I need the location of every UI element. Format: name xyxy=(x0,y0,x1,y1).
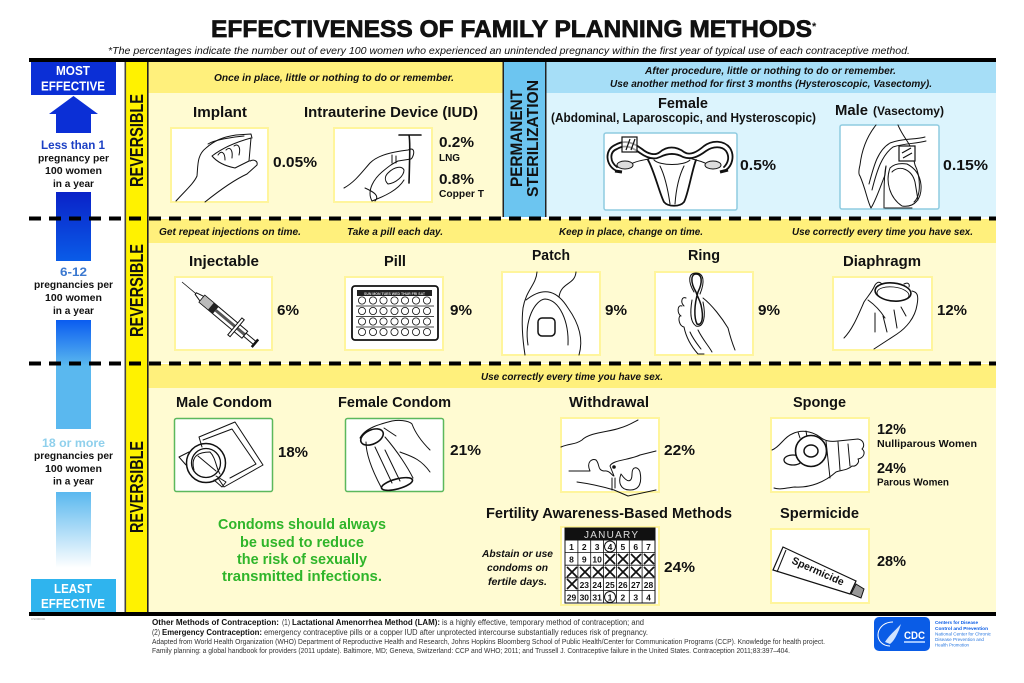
most effective label: EFFECTIVE xyxy=(41,78,105,94)
method: injectable: Injectable xyxy=(189,253,259,270)
method: male sterilization xyxy=(835,102,988,209)
callout: condoms message: Condoms should always xyxy=(218,516,386,533)
method: sponge xyxy=(771,394,977,492)
icon: calendar: JANUARY xyxy=(584,530,638,541)
heading: tier 2 instructions xyxy=(159,226,973,238)
tier 1 rate: Less than 1 xyxy=(41,138,105,152)
method: male sterilization: (Vasectomy) xyxy=(873,104,944,118)
tier 2 rate: 100 women xyxy=(45,292,102,304)
method: intrauterine device: 0.8% xyxy=(439,171,474,188)
icon: hand holding sponge xyxy=(772,431,864,489)
icon: spermicide tube: Spermicide xyxy=(790,555,846,589)
icon: condom package xyxy=(179,422,263,487)
heading: tier 2 instructions: Keep in place, change on time. xyxy=(559,226,703,238)
note: abstain or use condoms: condoms on xyxy=(487,562,548,574)
method: female sterilization: Female xyxy=(658,95,708,112)
most effective label xyxy=(31,62,116,95)
method: sponge: 24% xyxy=(877,460,906,477)
gradient bar 3 xyxy=(56,492,91,568)
callout: condoms message: be used to reduce xyxy=(240,534,364,551)
tier 1 rate: in a year xyxy=(53,178,94,190)
heading: tier 2 instructions: Use correctly every time you have sex. xyxy=(792,226,973,238)
permanent sterilization column xyxy=(502,60,546,217)
method: intrauterine device: Copper T xyxy=(439,188,485,200)
tier 2 rate: in a year xyxy=(53,305,94,317)
method: pill xyxy=(345,253,472,350)
reversible column xyxy=(124,60,149,613)
method: ring: Ring xyxy=(688,247,720,264)
icon: calendar: 28 xyxy=(644,580,653,590)
icon: hand holding ring xyxy=(678,273,735,354)
icon: calendar: 2 xyxy=(621,592,626,602)
heading: sterilization instruction: After procedure, little or nothing to do or remember. xyxy=(644,65,896,77)
method: male sterilization: 0.15% xyxy=(943,157,988,174)
tier 1 rate: pregnancy per xyxy=(38,152,109,164)
method: diaphragm: Diaphragm xyxy=(843,253,921,270)
tier 1 rate xyxy=(38,138,109,190)
icon: calendar: 3 xyxy=(633,592,638,602)
method: pill: 9% xyxy=(450,302,472,319)
icon: uterus diagram xyxy=(607,137,733,206)
arrow up xyxy=(49,96,98,133)
CDC organization text: National Center for Chronic xyxy=(935,632,992,636)
top rule xyxy=(29,58,996,62)
method: diaphragm: 12% xyxy=(937,302,967,319)
callout: condoms message xyxy=(218,516,386,585)
footnote text xyxy=(152,618,825,655)
method: intrauterine device: 0.2% xyxy=(439,134,474,151)
occlusion square xyxy=(622,137,637,152)
tier 2 rate: 6-12 xyxy=(60,265,87,279)
permanent sterilization column: PERMANENT xyxy=(507,89,526,187)
method: implant: Implant xyxy=(193,104,247,121)
method: fertility awareness: Fertility Awareness-Based Methods xyxy=(486,505,732,522)
icon: female condom in hands xyxy=(358,420,430,493)
icon: calendar: 5 xyxy=(621,542,626,552)
method: patch: 9% xyxy=(605,302,627,319)
reversible column: REVERSIBLE xyxy=(127,94,147,187)
note: abstain or use condoms xyxy=(481,548,553,588)
method: female condom: 21% xyxy=(450,442,481,459)
vasectomy square xyxy=(899,146,915,161)
reversible column: REVERSIBLE xyxy=(127,441,147,533)
footnote text: (2) xyxy=(152,628,160,637)
tier 3 rate: pregnancies per xyxy=(34,450,113,462)
gradient bar 2 xyxy=(56,320,91,429)
icon: calendar: 10 xyxy=(592,554,602,564)
method: female sterilization: 0.5% xyxy=(740,157,776,174)
method: diaphragm xyxy=(833,253,967,350)
title: EFFECTIVENESS OF FAMILY PLANNING METHODS xyxy=(211,16,812,43)
CDC logo: CDC xyxy=(904,630,925,642)
tier 2 rate xyxy=(34,265,113,317)
tier 3 rate xyxy=(34,436,113,488)
icon: vasectomy diagram xyxy=(859,125,926,208)
footnote text: emergency contraceptive pills or a copper IUD after unprotected intercourse substantially reduces risk of pregnancy. xyxy=(264,628,648,637)
icon: hand holding IUD xyxy=(344,135,421,201)
icon: calendar: 29 xyxy=(567,592,576,602)
method: sponge: Sponge xyxy=(793,394,846,411)
tier 3 rate: 18 or more xyxy=(42,436,105,450)
method: fertility awareness xyxy=(481,505,732,605)
method: pill: Pill xyxy=(384,253,406,270)
icon: pill pack: SUN MON TUES WED THUR FRI SAT xyxy=(364,292,426,296)
heading: tier 2 instructions: Take a pill each day. xyxy=(347,226,443,238)
footnote text: Family planning: a global handbook for providers (2011 update). Baltimore, MD; Geneva, Switzerland: CCP and WHO; 2011; and Trussell J. Contraceptive failure in the United States. Contraception 2011;83:397–404. xyxy=(152,648,790,655)
icon: calendar: 25 xyxy=(605,580,615,590)
icon: calendar: 3 xyxy=(595,542,600,552)
method: intrauterine device: LNG xyxy=(439,152,460,164)
method: sponge: Nulliparous Women xyxy=(877,438,977,450)
dashed tier divider 2 xyxy=(29,362,996,366)
title: * xyxy=(812,21,817,33)
CDC organization text: Centers for Disease xyxy=(935,620,978,625)
icon: calendar: 2 xyxy=(582,542,587,552)
method: patch xyxy=(502,247,627,355)
gradient bar 1 xyxy=(56,192,91,261)
heading: sterilization instruction: Use another method for first 3 months (Hysteroscopic, Vasectomy). xyxy=(610,78,932,90)
icon: calendar: 8 xyxy=(569,554,574,564)
CDC organization text xyxy=(935,620,992,648)
permanent sterilization column: STERILIZATION xyxy=(525,80,542,197)
bottom rule xyxy=(29,612,996,616)
heading: tier 1 reversible instruction: Once in place, little or nothing to do or remember. xyxy=(214,72,454,84)
dashed tier divider 1 xyxy=(29,216,996,220)
method: injectable xyxy=(175,253,299,352)
method: intrauterine device: Intrauterine Device (IUD) xyxy=(304,104,478,121)
icon: calendar: 1 xyxy=(569,542,574,552)
method: spermicide: 28% xyxy=(877,553,906,570)
icon: calendar: 1 xyxy=(608,592,613,602)
heading: tier 3 instruction: Use correctly every time you have sex. xyxy=(481,371,663,383)
method: male sterilization: Male xyxy=(835,102,868,119)
icon: calendar: 7 xyxy=(646,542,651,552)
heading: sterilization instruction xyxy=(610,65,932,90)
footnote text: Lactational Amenorrhea Method (LAM): xyxy=(292,618,440,627)
method: sponge: Parous Women xyxy=(877,476,949,488)
footnote text: (1) xyxy=(282,618,290,627)
method: implant: 0.05% xyxy=(273,154,317,171)
subtitle note: *The percentages indicate the number out of every 100 women who experienced an unintended pregnancy within the first year of typical use of each contraceptive method. xyxy=(108,45,910,57)
least effective label xyxy=(31,579,116,612)
CDC logo xyxy=(874,617,930,651)
icon: withdrawal illustration xyxy=(561,420,656,496)
reversible column: REVERSIBLE xyxy=(127,244,147,337)
note: abstain or use condoms: fertile days. xyxy=(488,576,547,588)
icon: calendar: 30 xyxy=(580,592,589,602)
heading: tier 2 instructions: Get repeat injections on time. xyxy=(159,226,301,238)
note: abstain or use condoms: Abstain or use xyxy=(481,548,553,560)
panel: tier 1 reversible background xyxy=(148,62,503,217)
method: male condom: 18% xyxy=(278,444,308,461)
method: injectable: 6% xyxy=(277,302,299,319)
tier 3 rate: 100 women xyxy=(45,463,102,475)
method: withdrawal xyxy=(561,394,695,496)
method: withdrawal: Withdrawal xyxy=(569,394,649,411)
panel: tier 3 background xyxy=(148,364,996,612)
icon: calendar xyxy=(565,528,655,603)
method: female sterilization xyxy=(551,95,816,210)
document code: CS000000 xyxy=(31,617,46,621)
icon: calendar: 23 xyxy=(580,580,589,590)
method: female condom xyxy=(338,394,481,493)
icon: syringe xyxy=(175,274,263,352)
method: implant xyxy=(171,104,317,202)
callout: condoms message: transmitted infections. xyxy=(222,568,382,585)
panel: tier 2 background xyxy=(148,219,996,363)
icon: calendar: 31 xyxy=(592,592,602,602)
least effective label: LEAST xyxy=(54,581,92,596)
footnote text: Adapted from World Health Organization (WHO) Department of Reproductive Health and Research, Johns Hopkins Bloomberg School of Public Health/Center for Communication Programs (CCP). Knowledge for health project. xyxy=(152,639,825,646)
CDC organization text: Health Promotion xyxy=(935,642,969,648)
CDC organization text: Control and Prevention xyxy=(935,626,988,631)
method: intrauterine device xyxy=(304,104,485,202)
method: patch: Patch xyxy=(532,247,570,264)
icon: calendar: 6 xyxy=(633,542,638,552)
icon: hand holding implant xyxy=(176,134,257,202)
method: ring xyxy=(655,247,780,355)
tier 1 rate: 100 women xyxy=(45,165,102,177)
icon: calendar: 9 xyxy=(582,554,587,564)
method: female condom: Female Condom xyxy=(338,394,451,411)
most effective label: MOST xyxy=(56,63,90,78)
footnote text: Emergency Contraception: xyxy=(162,628,262,637)
method: sponge: 12% xyxy=(877,421,906,438)
method: ring: 9% xyxy=(758,302,780,319)
method: spermicide: Spermicide xyxy=(780,505,859,522)
least effective label: EFFECTIVE xyxy=(41,596,105,611)
footnote text: Other Methods of Contraception: xyxy=(152,618,279,627)
icon: calendar: 4 xyxy=(608,542,613,552)
icon: calendar: 4 xyxy=(646,592,651,602)
callout: condoms message: the risk of sexually xyxy=(237,551,368,568)
method: male condom: Male Condom xyxy=(176,394,272,411)
icon: hand holding diaphragm xyxy=(844,281,918,349)
CDC organization text: Disease Prevention and xyxy=(935,637,984,642)
icon: calendar: 26 xyxy=(618,580,628,590)
icon: calendar: 27 xyxy=(631,580,641,590)
method: fertility awareness: 24% xyxy=(664,559,695,576)
icon: calendar: 24 xyxy=(592,580,602,590)
method: withdrawal: 22% xyxy=(664,442,695,459)
method: female sterilization: (Abdominal, Laparoscopic, and Hysteroscopic) xyxy=(551,110,816,125)
tier 3 rate: in a year xyxy=(53,476,94,488)
icon: arm with patch xyxy=(522,272,581,355)
method: male condom xyxy=(174,394,308,492)
footnote text: is a highly effective, temporary method of contraception; and xyxy=(442,618,644,627)
method: spermicide xyxy=(771,505,906,603)
effectiveness scale xyxy=(31,62,116,612)
tier 2 rate: pregnancies per xyxy=(34,279,113,291)
panel: permanent sterilization background xyxy=(546,62,996,217)
